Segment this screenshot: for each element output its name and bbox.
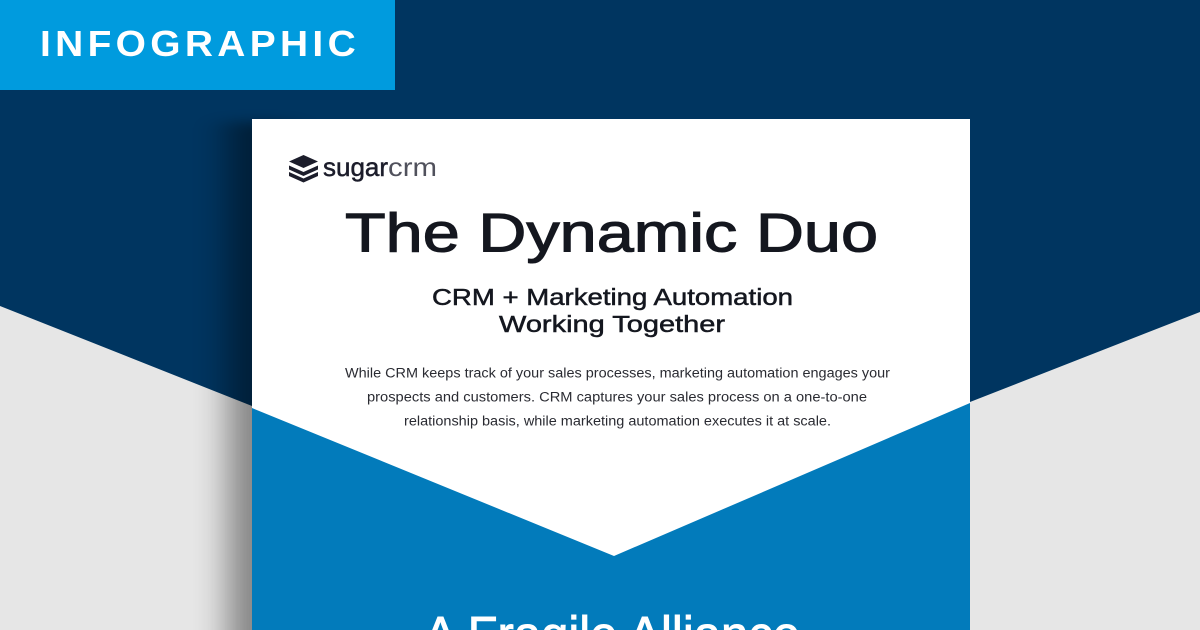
card drop shadow [228,122,288,630]
intro paragraph [345,366,891,428]
subtitle [432,284,793,337]
subtitle: CRM + Marketing Automation [432,284,793,310]
card: blue chevron section [252,403,970,630]
intro paragraph: relationship basis, while marketing automation executes it at scale. [404,414,831,428]
title: The Dynamic Duo [345,202,878,264]
wordmark: sugarcrm [323,152,437,182]
intro paragraph: prospects and customers. CRM captures your sales process on a one-to-one [367,390,867,404]
logo: sugarcrm [289,152,437,182]
badge: infographic [0,0,395,90]
badge: infographic: INFOGRAPHIC [40,23,360,64]
card: white top [252,119,970,630]
intro paragraph: While CRM keeps track of your sales processes, marketing automation engages your [345,366,891,380]
icon: stacked layers [289,155,318,182]
subtitle: Working Together [499,311,725,337]
